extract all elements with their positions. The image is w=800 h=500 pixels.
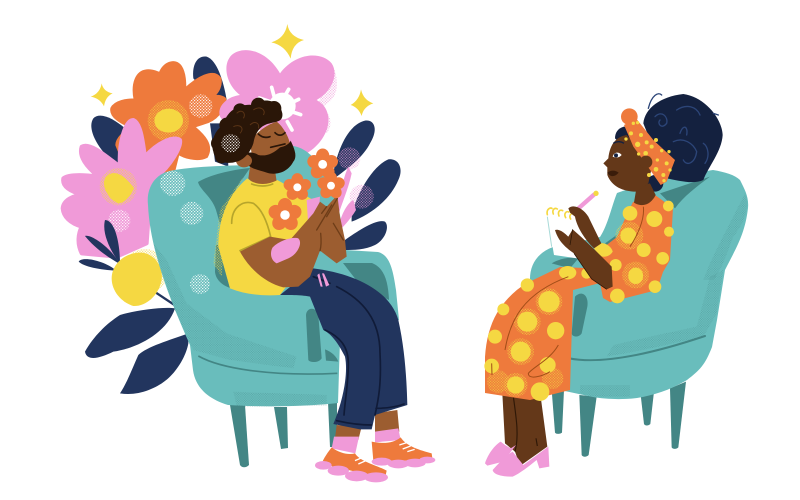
yellow round flower bbox=[112, 249, 168, 306]
open hand and arm bbox=[555, 229, 613, 289]
hand contour bbox=[570, 229, 607, 289]
trouser creases bbox=[313, 277, 404, 425]
chair stipple and seat details bbox=[153, 243, 338, 407]
shoe, back bbox=[372, 437, 435, 468]
dress bbox=[485, 195, 673, 400]
pink flower, back bbox=[219, 50, 337, 157]
shoe, front bbox=[315, 447, 388, 482]
man lower body bbox=[280, 268, 435, 482]
seat crease bbox=[569, 336, 705, 360]
icon: small right sparkle bbox=[351, 89, 373, 116]
chair stipple shading bbox=[580, 270, 723, 397]
armrest groove bbox=[572, 294, 588, 336]
face bbox=[250, 122, 295, 170]
white speckles on left chair bbox=[160, 171, 203, 225]
writing hand and forearm bbox=[568, 206, 601, 248]
right armchair bbox=[530, 170, 748, 457]
hair speckle bbox=[221, 134, 240, 153]
earring bbox=[647, 173, 651, 177]
trousers bbox=[280, 268, 407, 429]
navy leaves behind flowers bbox=[91, 56, 401, 250]
chair body bbox=[530, 170, 748, 399]
dots halos upper bbox=[615, 222, 649, 288]
shirt bbox=[218, 178, 313, 295]
man bbox=[211, 98, 435, 482]
notepad bbox=[547, 208, 577, 258]
orange flower bbox=[112, 62, 225, 173]
lower left foliage bbox=[79, 220, 188, 394]
chair stipple shading bbox=[153, 243, 327, 407]
left armchair bbox=[148, 146, 399, 467]
lips bbox=[607, 171, 619, 176]
beard bbox=[242, 141, 295, 174]
hair puff bbox=[615, 94, 723, 192]
head bbox=[211, 98, 295, 174]
dots halos lower bbox=[487, 288, 563, 397]
dress polka dots bbox=[559, 201, 674, 288]
moustache and closed eyes bbox=[258, 133, 285, 147]
armrest groove bbox=[306, 309, 322, 362]
pen bbox=[577, 191, 599, 209]
icon: large sparkle bbox=[271, 24, 304, 59]
bouquet petal on arm bbox=[271, 238, 300, 263]
yellow stipple behind shirt bbox=[213, 177, 243, 277]
legs bbox=[502, 393, 547, 466]
woman bbox=[484, 94, 723, 477]
hair curls bbox=[648, 94, 718, 163]
woman upper body bbox=[547, 94, 723, 289]
stipple bbox=[703, 193, 747, 280]
chair legs bbox=[552, 382, 686, 457]
chair legs bbox=[230, 402, 337, 467]
cuff bbox=[594, 243, 613, 257]
headband bbox=[621, 108, 675, 185]
socks bbox=[332, 428, 401, 453]
white speckle on chair bbox=[190, 274, 210, 294]
neck bbox=[634, 183, 656, 205]
ankles bbox=[335, 410, 399, 440]
chair shading bbox=[198, 168, 389, 300]
arms and hands bbox=[240, 195, 347, 287]
ear bbox=[236, 154, 252, 167]
dress folds bbox=[492, 277, 568, 377]
pink flower, left bbox=[63, 120, 180, 257]
bouquet wrap bbox=[307, 167, 356, 287]
flower bouquet backdrop bbox=[63, 24, 401, 257]
man upper body bbox=[211, 98, 356, 295]
neck bbox=[248, 167, 277, 185]
woman legs and shoes bbox=[485, 393, 549, 477]
seat crease bbox=[198, 356, 337, 374]
seam bbox=[630, 207, 644, 247]
shirt details bbox=[232, 184, 273, 251]
ear bbox=[640, 156, 652, 168]
small orange flowers bbox=[267, 148, 346, 233]
face bbox=[603, 135, 653, 192]
armrest shadow bbox=[325, 349, 338, 362]
eye and brow bbox=[613, 142, 624, 157]
dots lower bbox=[484, 269, 661, 401]
leaf stipple bbox=[338, 147, 374, 209]
dark stem leaves bbox=[79, 220, 188, 394]
hair bbox=[211, 98, 282, 163]
chair shading bbox=[552, 177, 747, 280]
chair body bbox=[148, 146, 399, 406]
shoes bbox=[485, 442, 549, 477]
dots upper bbox=[559, 201, 674, 282]
icon: small left sparkle bbox=[91, 83, 113, 106]
